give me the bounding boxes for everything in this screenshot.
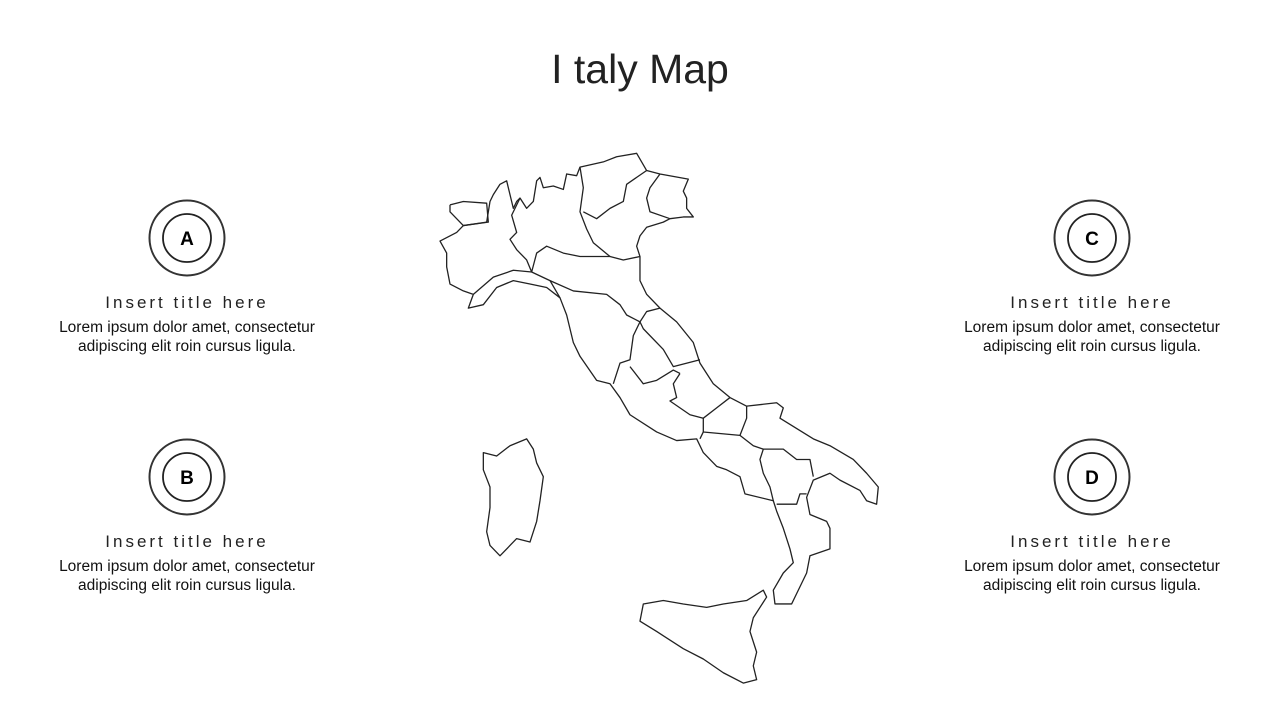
- panel: B: [59, 438, 315, 594]
- heading B: Insert title here: [105, 532, 269, 551]
- icon: circle A: A: [180, 229, 194, 250]
- icon: circle D: [1054, 438, 1130, 516]
- text C: [964, 319, 1220, 355]
- icon: circle C: C: [1085, 229, 1099, 250]
- regional borders: [450, 201, 488, 226]
- panel: A: [59, 200, 315, 355]
- icon: circle A: [148, 200, 226, 276]
- text B: adipiscing elit roin cursus ligula.: [78, 577, 296, 594]
- heading A: Insert title here: [105, 293, 269, 312]
- text B: Lorem ipsum dolor amet, consectetur: [59, 558, 315, 575]
- text C: Lorem ipsum dolor amet, consectetur: [964, 319, 1220, 336]
- heading D: Insert title here: [1010, 532, 1174, 551]
- text D: [964, 558, 1220, 594]
- icon: circle C: [1054, 200, 1130, 276]
- Sardinia: [483, 439, 543, 556]
- icon: circle B: [148, 438, 226, 516]
- icon: circle D: D: [1085, 468, 1099, 489]
- panel: D: [964, 438, 1220, 594]
- text C: adipiscing elit roin cursus ligula.: [983, 338, 1201, 355]
- mainland outline: [440, 153, 878, 604]
- text A: adipiscing elit roin cursus ligula.: [78, 338, 296, 355]
- panel: C: [964, 200, 1220, 355]
- Sicily: [640, 590, 767, 683]
- text A: Lorem ipsum dolor amet, consectetur: [59, 319, 315, 336]
- title: I taly Map: [551, 46, 729, 92]
- text B: [59, 558, 315, 594]
- icon: circle B: B: [180, 468, 194, 489]
- text D: adipiscing elit roin cursus ligula.: [983, 577, 1201, 594]
- heading C: Insert title here: [1010, 293, 1174, 312]
- text D: Lorem ipsum dolor amet, consectetur: [964, 558, 1220, 575]
- text A: [59, 319, 315, 355]
